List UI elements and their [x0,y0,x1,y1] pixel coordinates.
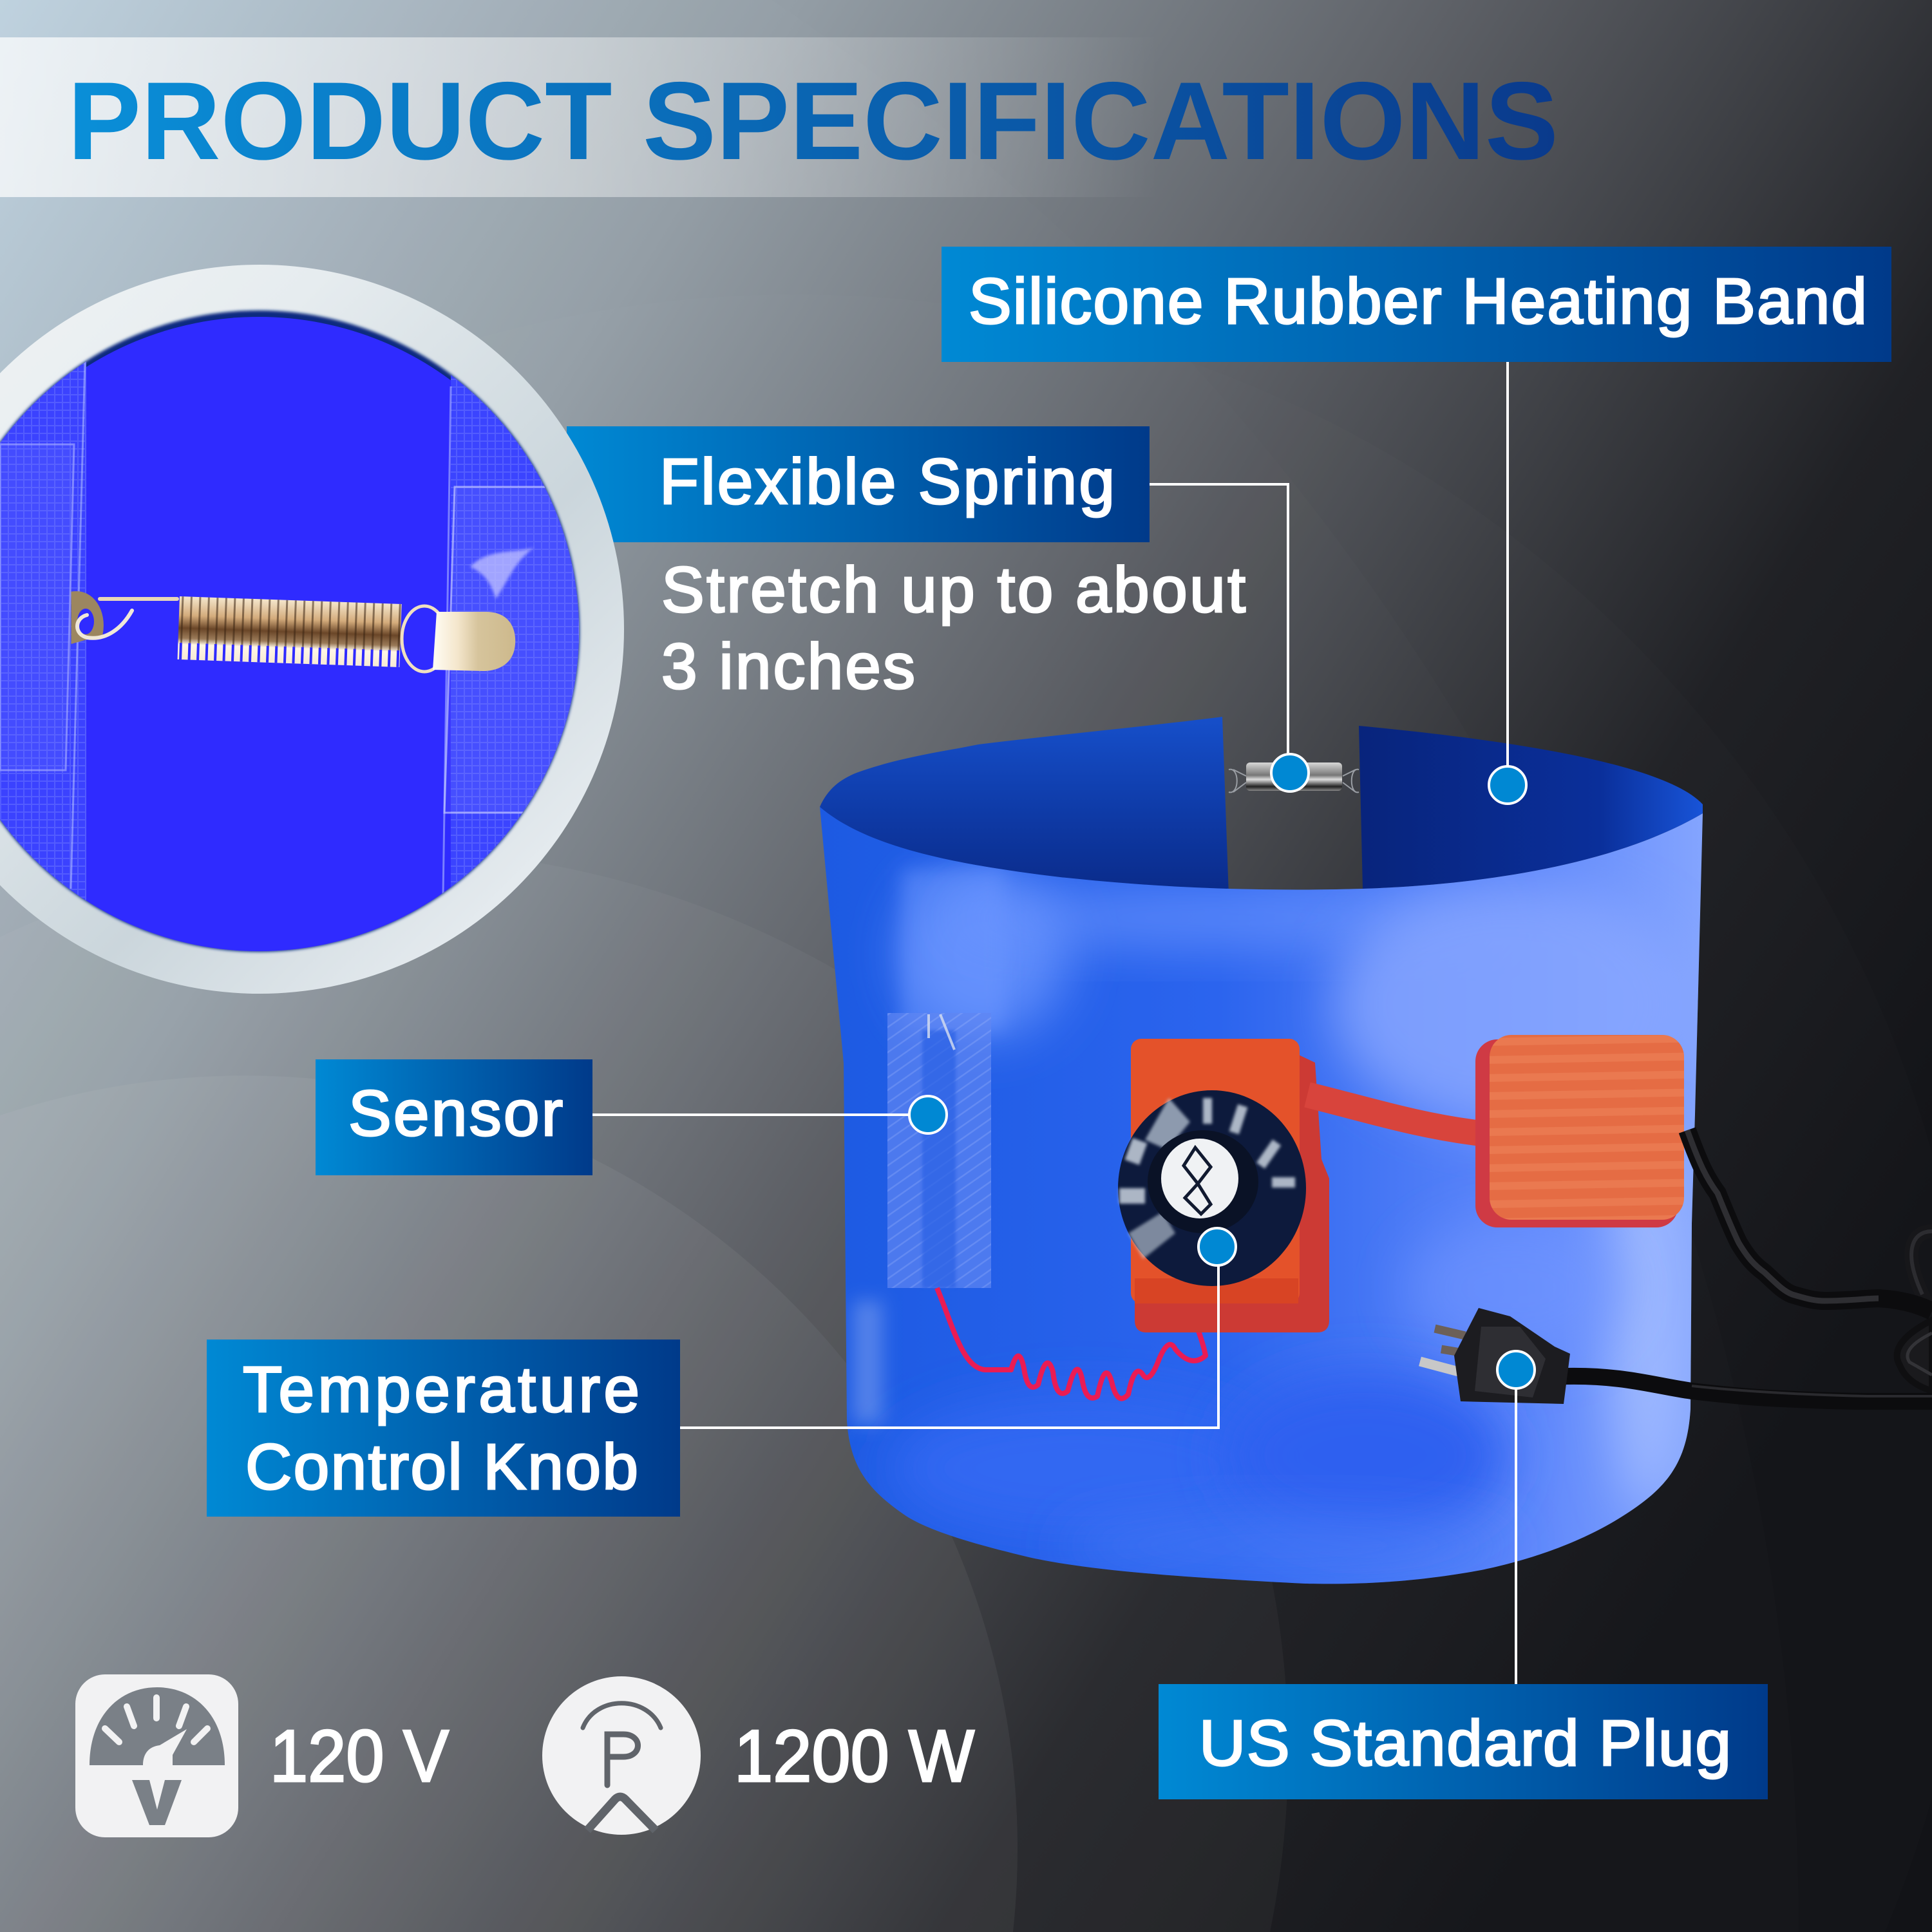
label: temperature control knob: Control Knob [245,1431,638,1503]
sensor red wire [937,1288,1206,1399]
spring ring and tab [402,606,515,672]
band inner back right [1359,726,1703,889]
text: 120 V: 120 V [270,1716,449,1797]
text: stretch description [661,554,1245,703]
plug [1420,1308,1570,1404]
label: us standard plug [1159,1684,1768,1799]
spring hook [72,592,177,643]
cord coil [1897,1231,1932,1391]
band inner back left [820,717,1229,896]
temperature dial [1118,1090,1306,1286]
label: sensor: Sensor [348,1077,563,1150]
title banner [0,37,1558,197]
dial white centre [1161,1139,1238,1218]
label: silicone rubber heating band: Silicone Rubber Heating Band [969,265,1867,337]
marker dots [909,754,1535,1388]
heater connector tube [1307,1095,1481,1133]
label: flexible spring bar: Flexible Spring [659,446,1115,518]
label: silicone rubber heating band [942,247,1891,362]
label: sensor [316,1059,592,1175]
text: 1200 W: 1200 W [734,1716,974,1797]
temperature sensor patch [887,1013,991,1288]
label: flexible spring bar [567,426,1150,542]
thermostat housing [1131,1039,1329,1332]
heating band product [811,717,1932,1597]
pad power cord [1687,1130,1932,1311]
label: us standard plug: US Standard Plug [1199,1707,1731,1779]
label: temperature control knob [207,1340,680,1517]
plug cord [1565,1376,1932,1401]
icon: power [542,1676,701,1835]
icon: voltage gauge [75,1674,238,1837]
band spring connector [1229,762,1359,792]
text: stretch description: Stretch up to about [661,554,1245,626]
label: temperature control knob: Temperature [243,1354,639,1426]
leader lines [592,362,1516,1684]
title: PRODUCT SPECIFICATIONS [68,59,1558,183]
text: stretch description: 3 inches [661,630,915,703]
band front body [811,799,1713,1597]
zoom circle: spring close-up [0,265,624,994]
spring coil [178,596,402,667]
heater pad [1475,1035,1684,1227]
